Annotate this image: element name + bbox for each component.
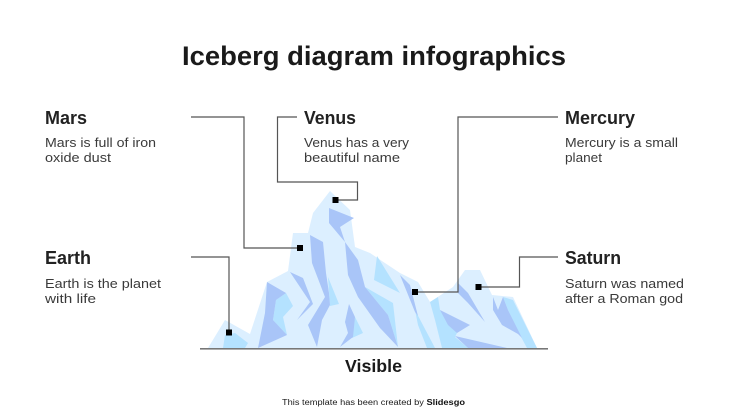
iceberg body: [208, 191, 537, 348]
Earth text: Earth is the planet: [45, 276, 161, 291]
Saturn text: Saturn was named: [565, 276, 684, 291]
callout: Venus: [304, 108, 410, 165]
Venus text: Venus has a very: [304, 135, 410, 150]
connector: Venus: [278, 117, 358, 203]
callout: Earth: with life: [44, 291, 96, 306]
Mercury text: Mercury is a small: [565, 135, 678, 150]
callout: Mars: [45, 108, 156, 165]
footer credit: This template has been created by Slidesgo: [282, 398, 465, 407]
callout: Mercury: [565, 108, 678, 165]
connector: Saturn: [476, 257, 558, 290]
title: Iceberg diagram infographics: [182, 41, 566, 71]
Earth heading: Earth: [45, 248, 91, 268]
iceberg illustration: [208, 191, 537, 348]
Mercury heading: Mercury: [565, 108, 635, 128]
connector: Mercury: [412, 117, 558, 295]
Mars heading: Mars: [45, 108, 87, 128]
baseline: [200, 348, 548, 350]
connector: Earth: [191, 257, 232, 336]
label: Visible: Visible: [345, 356, 402, 376]
callout: Mars: oxide dust: [45, 150, 111, 165]
callout: Saturn: [565, 248, 684, 306]
iceberg shadow facets: [258, 208, 522, 348]
callout: Mercury: planet: [565, 150, 602, 165]
Saturn heading: Saturn: [565, 248, 621, 268]
connector: Mars: [191, 117, 303, 251]
callout: Venus: beautiful name: [304, 150, 400, 165]
iceberg highlight facets: [223, 256, 537, 348]
callout: Saturn: after a Roman god: [565, 291, 683, 306]
Mars text: Mars is full of iron: [45, 135, 156, 150]
Venus heading: Venus: [304, 108, 356, 128]
callout: Earth: [44, 248, 161, 306]
